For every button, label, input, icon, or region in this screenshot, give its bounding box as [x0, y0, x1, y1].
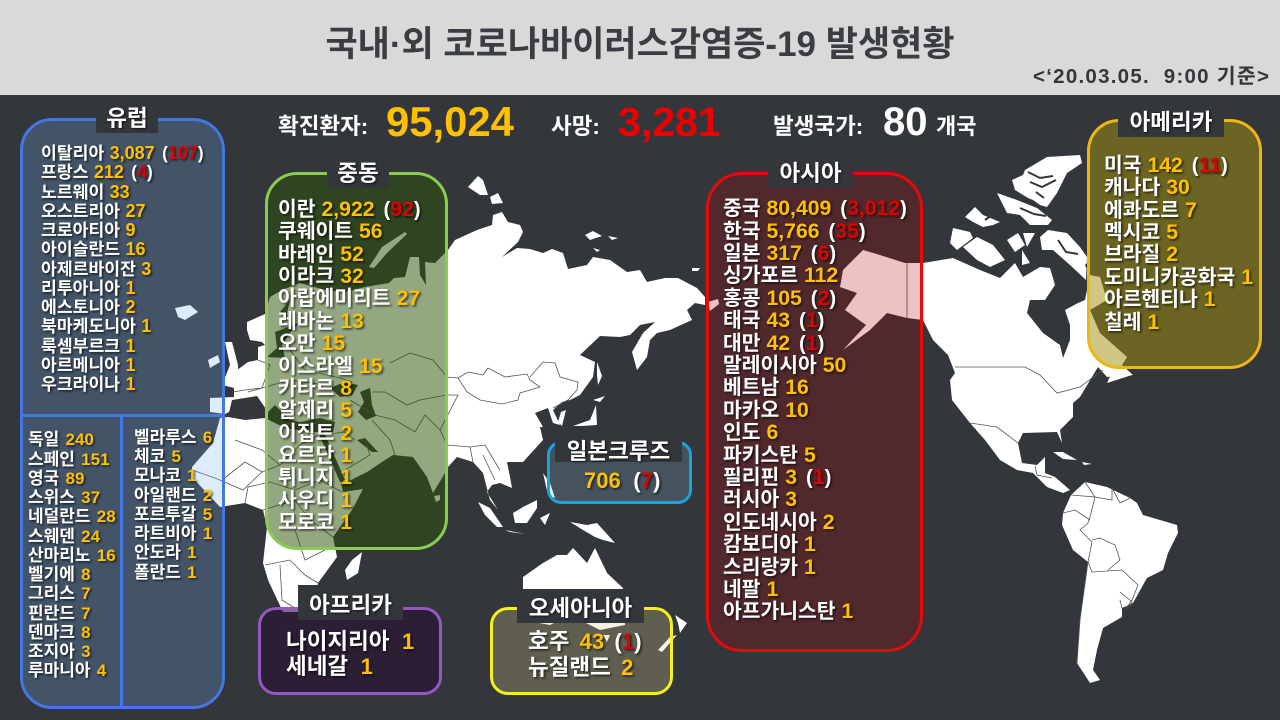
Europe list lower right: 체코 5	[134, 447, 181, 466]
Oceania heading: 오세아니아	[529, 596, 632, 621]
Middle East list: 레바논 13	[278, 310, 364, 333]
Asia list: 중국 80,409 (3,012)	[723, 197, 907, 220]
Asia list: 말레이시아 50	[723, 354, 846, 377]
Asia list: 대만 42 (1)	[723, 332, 824, 355]
Europe list lower left: 영국 89	[28, 469, 84, 488]
stat: countries unit: 개국	[936, 114, 976, 139]
Oceania list: 뉴질랜드 2	[528, 655, 633, 680]
Europe list lower right: 아일랜드 2	[134, 486, 212, 505]
Asia list: 마카오 10	[723, 399, 809, 422]
Europe list lower left: 덴마크 8	[28, 623, 91, 642]
Europe list lower right: 라트비아 1	[134, 524, 212, 543]
Asia list: 파키스탄 5	[723, 444, 816, 467]
Middle East list: 이란 2,922 (92)	[278, 198, 421, 221]
Europe list lower left: 스페인 151	[28, 450, 110, 469]
Europe list upper: 아이슬란드 16	[41, 239, 145, 259]
Americas list: 도미니카공화국 1	[1104, 266, 1253, 289]
Europe list lower left	[28, 430, 118, 680]
map: country borders	[192, 263, 1138, 663]
Europe list upper: 리투아니아 1	[41, 278, 135, 298]
Europe list lower left: 네덜란드 28	[28, 507, 116, 526]
map: seas and gulfs	[228, 258, 1092, 482]
Europe list upper: 노르웨이 33	[41, 182, 130, 202]
Europe list lower left: 스위스 37	[28, 488, 100, 507]
Asia heading: 아시아	[779, 160, 842, 186]
Europe list upper: 아제르바이잔 3	[41, 258, 151, 278]
Asia list: 필리핀 3 (1)	[723, 466, 831, 489]
Europe list lower left: 산마리노 16	[28, 546, 116, 565]
Africa list: 세네갈 1	[286, 654, 373, 678]
Europe divider vertical	[120, 416, 122, 709]
Europe list upper: 오스트리아 27	[41, 201, 145, 221]
cruise heading	[555, 433, 682, 462]
Africa list	[286, 628, 416, 678]
Europe divider horizontal	[23, 414, 222, 416]
panel: Europe	[20, 118, 225, 709]
Europe list lower left: 스웨덴 24	[28, 527, 100, 546]
Middle East heading: 중동	[337, 161, 379, 186]
Europe list lower left: 그리스 7	[28, 584, 91, 603]
Americas list: 캐나다 30	[1104, 176, 1190, 199]
map: arctic inlets	[985, 172, 1078, 254]
Asia list: 홍콩 105 (2)	[723, 287, 836, 310]
Americas list: 에콰도르 7	[1104, 199, 1197, 222]
Asia list: 네팔 1	[723, 578, 778, 601]
Middle East list: 이라크 32	[278, 265, 364, 288]
map: land masses	[175, 155, 1178, 683]
panel: Americas	[1087, 119, 1262, 369]
Europe list lower left: 조지아 3	[28, 642, 91, 661]
Asia list: 한국 5,766 (35)	[723, 220, 866, 243]
Middle East list: 쿠웨이트 56	[278, 220, 383, 243]
Europe list lower right: 안도라 1	[134, 543, 197, 562]
header band	[0, 0, 1280, 95]
Asia heading	[768, 160, 853, 188]
Europe list lower left: 독일 240	[28, 430, 94, 449]
stat: confirmed label: 확진환자:	[278, 114, 368, 139]
Oceania list: 호주 43 (1)	[528, 629, 642, 654]
Americas heading: 아메리카	[1130, 110, 1212, 134]
Asia list: 아프가니스탄 1	[723, 600, 853, 623]
Europe list lower right	[134, 428, 214, 582]
date note: <‘20.03.05. 9:00 기준>	[1033, 65, 1270, 88]
Europe list upper: 우크라이나 1	[41, 374, 135, 394]
Middle East list: 요르단 1	[278, 444, 352, 467]
Asia list: 러시아 3	[723, 488, 797, 511]
panel: Africa	[258, 607, 442, 695]
Asia list: 인도 6	[723, 421, 778, 444]
Europe list upper: 프랑스 212 (4)	[41, 162, 153, 182]
Europe list lower right: 포르투갈 5	[134, 505, 212, 524]
panel: Middle East	[265, 172, 448, 550]
panel: Oceania	[490, 607, 673, 695]
stat: deaths label: 사망:	[551, 114, 600, 139]
Asia list: 캄보디아 1	[723, 533, 816, 556]
Asia list: 인도네시아 2	[723, 511, 835, 534]
Europe list lower right: 모나코 1	[134, 466, 197, 485]
Europe list upper: 북마케도니아 1	[41, 316, 151, 336]
Europe list upper: 에스토니아 2	[41, 297, 135, 317]
Middle East list: 아랍에미리트 27	[278, 287, 420, 310]
Americas list: 칠레 1	[1104, 311, 1159, 334]
panel: Asia	[706, 172, 923, 652]
stat: confirmed number: 95,024	[386, 98, 514, 145]
Asia list: 베트남 16	[723, 376, 809, 399]
Middle East list: 오만 15	[278, 332, 345, 355]
Americas heading	[1118, 104, 1224, 137]
Oceania list	[528, 629, 643, 680]
Europe heading	[96, 104, 158, 133]
Europe list lower left: 루마니아 4	[28, 661, 106, 680]
Middle East list: 이집트 2	[278, 422, 352, 445]
title: 국내·외 코로나바이러스감염증-19 발생현황	[325, 25, 955, 64]
Middle East list: 모로코 1	[278, 511, 352, 534]
Europe list lower left: 벨기에 8	[28, 565, 91, 584]
Asia list: 스리랑카 1	[723, 556, 816, 579]
Middle East list: 이스라엘 15	[278, 355, 383, 378]
cruise count: 706 (7)	[584, 468, 660, 493]
stat: deaths number: 3,281	[618, 99, 721, 145]
Europe list upper: 이탈리아 3,087 (107)	[41, 143, 204, 163]
Asia list: 싱가포르 112	[723, 264, 838, 287]
Europe list upper: 아르메니아 1	[41, 355, 135, 375]
Europe list upper: 크로아티아 9	[41, 220, 135, 240]
Americas list: 멕시코 5	[1104, 221, 1178, 244]
Africa heading	[298, 585, 403, 620]
Americas list	[1104, 154, 1255, 334]
Americas list: 아르헨티나 1	[1104, 288, 1216, 311]
Europe list lower left: 핀란드 7	[28, 604, 91, 623]
Middle East heading	[327, 160, 389, 188]
Middle East list: 튀니지 1	[278, 466, 352, 489]
Europe list lower right: 벨라루스 6	[134, 428, 212, 447]
Europe list upper: 룩셈부르크 1	[41, 336, 135, 356]
Europe list lower right: 폴란드 1	[134, 563, 197, 582]
Middle East list: 카타르 8	[278, 377, 352, 400]
Asia list: 일본 317 (6)	[723, 242, 836, 265]
Europe heading: 유럽	[106, 106, 148, 130]
Middle East list: 바레인 52	[278, 243, 364, 266]
Europe list upper	[41, 143, 206, 394]
panel: Japan cruise	[547, 441, 692, 504]
Oceania heading	[517, 589, 644, 623]
Americas list: 미국 142 (11)	[1104, 154, 1228, 177]
Americas list: 브라질 2	[1104, 243, 1178, 266]
Middle East list	[278, 198, 422, 534]
cruise heading: 일본크루즈	[567, 438, 670, 464]
Middle East list: 알제리 5	[278, 399, 352, 422]
Africa heading: 아프리카	[309, 592, 392, 618]
Africa list: 나이지리아 1	[286, 628, 414, 654]
Asia list	[723, 197, 908, 623]
Middle East list: 사우디 1	[278, 489, 352, 512]
stat: countries number: 80	[883, 100, 928, 144]
Asia list: 태국 43 (1)	[723, 309, 824, 332]
stat: countries label: 발생국가:	[773, 114, 863, 139]
